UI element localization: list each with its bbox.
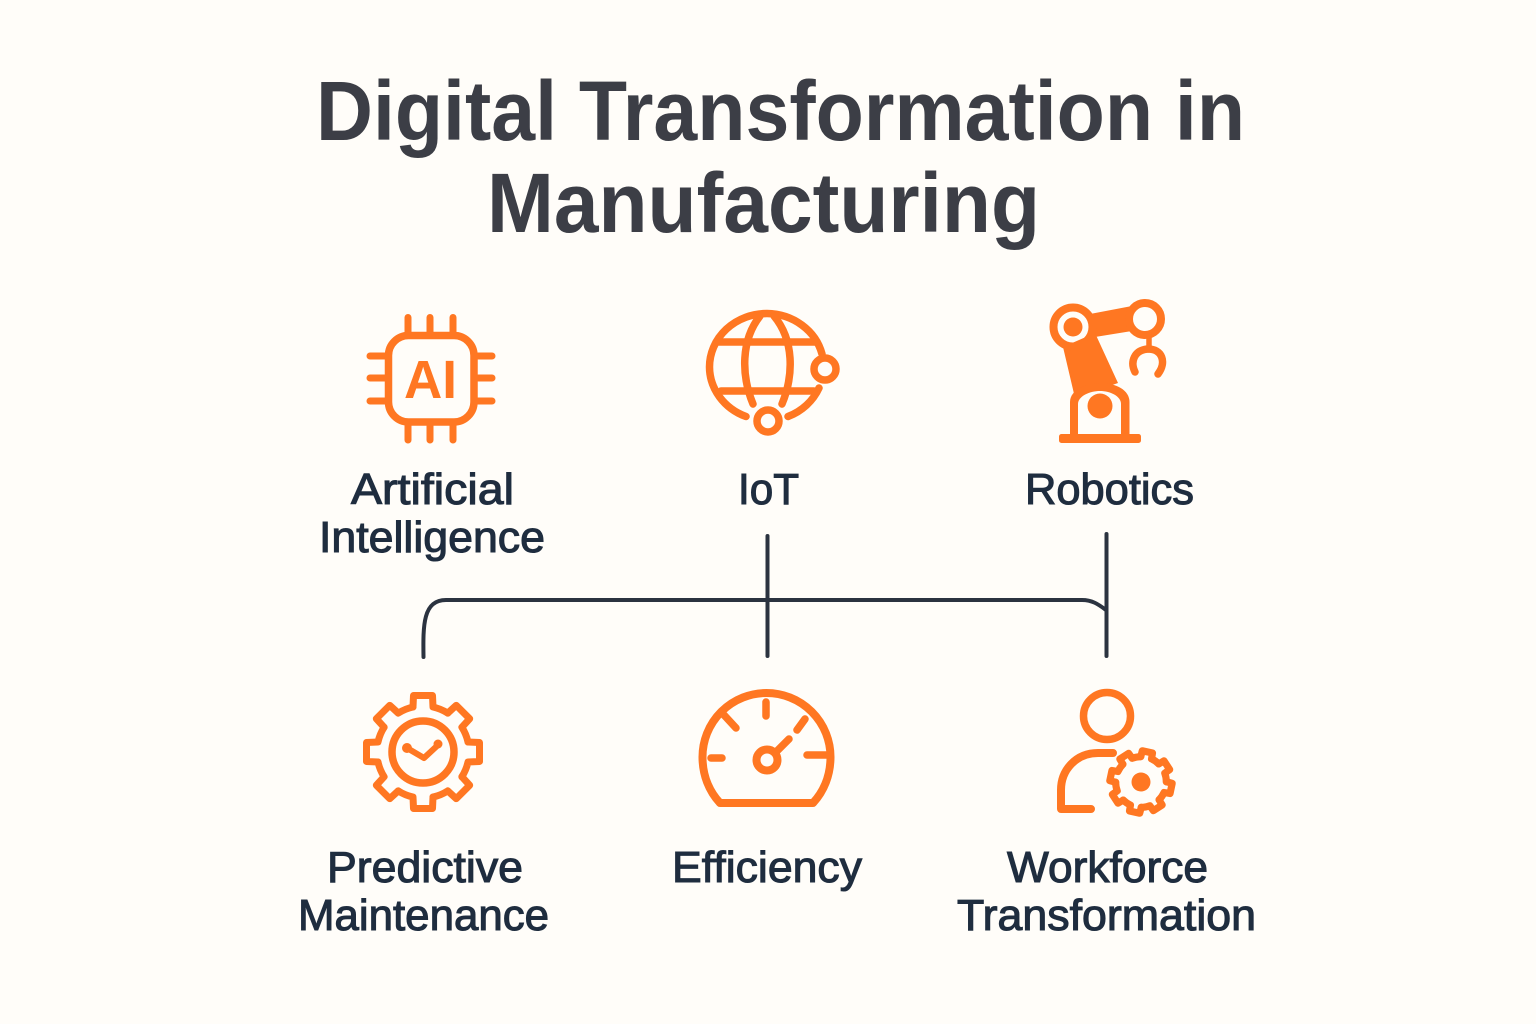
- icon: IoT globe: [710, 314, 836, 432]
- icon: AI chip: AI: [404, 350, 457, 410]
- title: [316, 64, 1245, 250]
- label: Workforce Transformation: Workforce: [1007, 843, 1208, 892]
- icon: efficiency gauge: [702, 693, 830, 803]
- label: Artificial Intelligence: [319, 465, 545, 562]
- icon: predictive maintenance gear: [366, 695, 480, 809]
- label: Artificial Intelligence: Intelligence: [319, 513, 545, 562]
- label: Workforce Transformation: [957, 843, 1256, 940]
- label: IoT: IoT: [738, 465, 799, 514]
- label: Robotics: Robotics: [1025, 465, 1194, 514]
- label: Predictive Maintenance: Maintenance: [298, 891, 549, 940]
- icon: workforce transformation: [1061, 692, 1178, 819]
- icon: robotic arm: [1054, 303, 1163, 443]
- label: Artificial Intelligence: Artificial: [351, 465, 514, 514]
- label: Workforce Transformation: Transformation: [957, 891, 1256, 940]
- icon: AI chip: [370, 318, 492, 440]
- title: Manufacturing: [487, 156, 1040, 250]
- label: Predictive Maintenance: Predictive: [327, 843, 523, 892]
- connector lines: [423, 534, 1106, 657]
- title: Digital Transformation in: [316, 64, 1245, 158]
- label: Efficiency: Efficiency: [672, 843, 862, 892]
- label: Predictive Maintenance: [298, 843, 549, 940]
